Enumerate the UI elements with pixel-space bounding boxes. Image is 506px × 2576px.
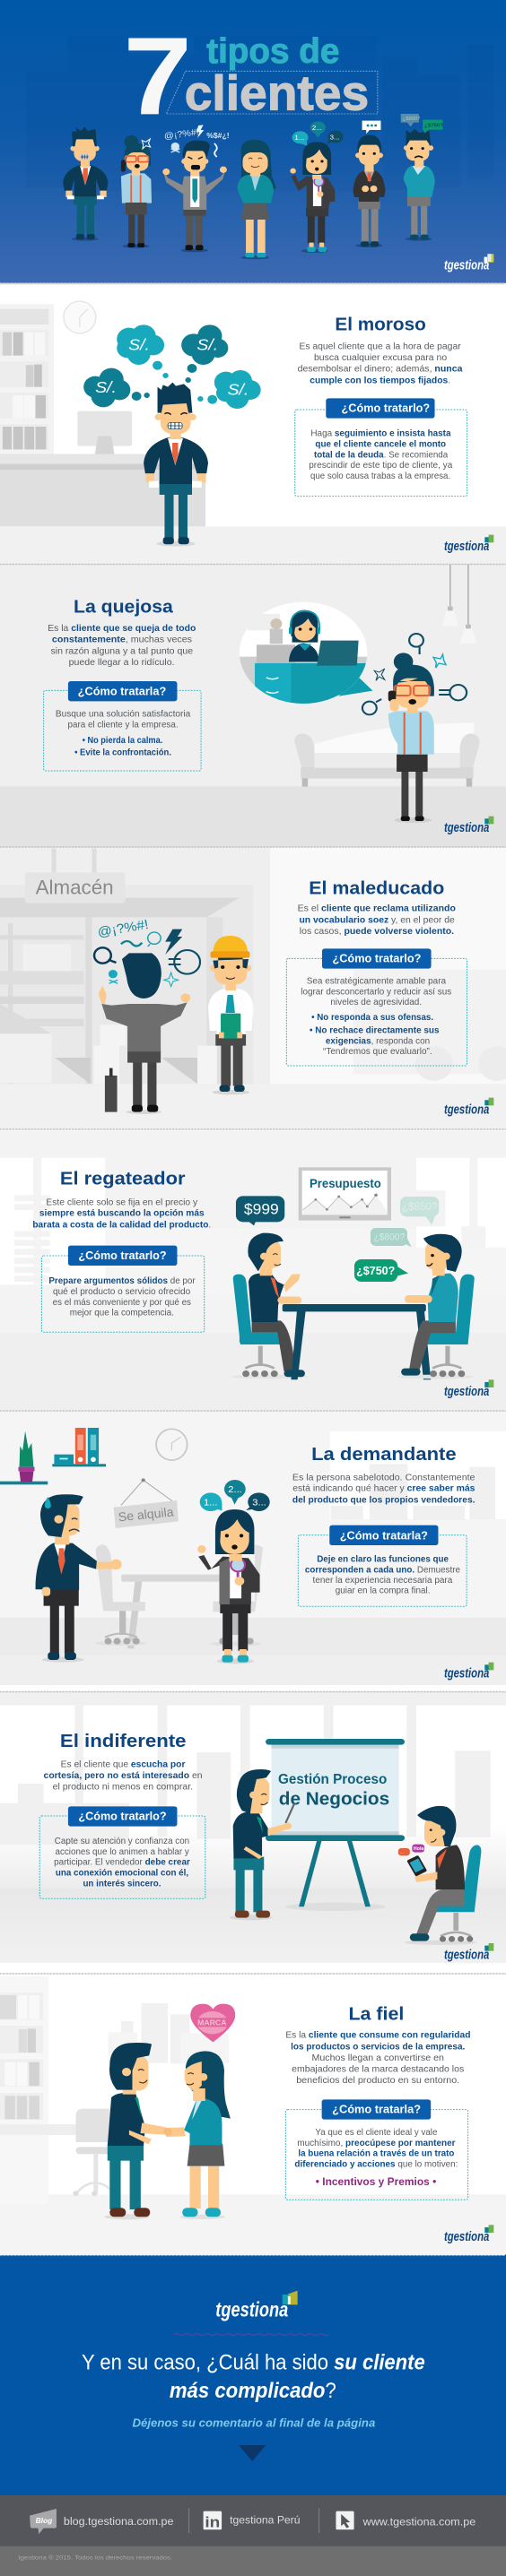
speech bubble: ¿$850?: [400, 1197, 439, 1225]
character: woman with magnifier: [197, 1480, 270, 1664]
advice box: una conexión emocional con él,: [56, 1868, 188, 1879]
advice box: qué el producto o servicio ofrecido: [53, 1286, 190, 1297]
description: está indicando qué hacer y cree saber más: [292, 1483, 475, 1494]
panel: links footer: [0, 2495, 506, 2576]
heading: La fiel: [348, 2003, 404, 2024]
advice box: Prepare argumentos sólidos de por: [48, 1275, 196, 1286]
advice box: ¿Cómo tratarlo?: [332, 951, 421, 965]
panel: el moroso: [0, 284, 506, 565]
panel: el regateador: [0, 1131, 506, 1410]
advice box: acciones que lo animen a hablar y: [56, 1846, 189, 1857]
speech bubble: $999: [236, 1196, 284, 1225]
flip chart: Gestión Proceso: [278, 1772, 388, 1787]
character: woman shaking hands: [163, 2051, 231, 2219]
description: [298, 903, 456, 937]
character: demandante: 2...: [312, 124, 322, 132]
advice box: • Incentivos y Premios •: [316, 2175, 436, 2188]
heading: El regateador: [60, 1168, 186, 1189]
description: cumple con los tiempos fijados.: [310, 376, 450, 385]
section edges: [0, 283, 506, 2255]
skyline background: [26, 36, 493, 191]
character: customer on phone: Hola: [414, 1846, 424, 1852]
advice box: [39, 1806, 205, 1898]
logo: tgestiona: [444, 1948, 490, 1962]
advice box: ¿Cómo tratarlo?: [342, 401, 430, 415]
title: clientes: clientes: [185, 66, 369, 121]
advice box: participar. El vendedor debe crear: [54, 1857, 191, 1868]
advice box: Deje en claro las funciones que: [317, 1554, 449, 1564]
character: woman on the phone: [362, 634, 467, 823]
character: maleducado: @¡?%#!: [163, 128, 200, 142]
link: website: www.tgestiona.com.pe: [362, 2516, 475, 2528]
advice box: total de la deuda. Se recomienda: [314, 450, 448, 460]
logo: [444, 535, 493, 554]
background office: [0, 1976, 229, 2203]
character: maleducado: %$#¿!: [206, 131, 230, 140]
character: man with empty pockets: [144, 383, 208, 547]
advice box: • Evite la confrontación.: [74, 748, 171, 758]
description: busca cualquier excusa para no: [314, 352, 447, 363]
description: Es la cliente que se queja de todo: [48, 623, 196, 634]
character: salesperson right in chair: [397, 1234, 475, 1379]
thought clouds: S/.: [128, 335, 150, 354]
copyright: tgestiona ® 2015. Todos los derechos reservados.: [19, 2554, 172, 2561]
link: website: [336, 2511, 475, 2529]
advice box: un interés sincero.: [83, 1879, 161, 1889]
background windows: [0, 1158, 506, 1295]
advice box: [298, 1526, 467, 1606]
icon: heart with brand: MARCA: [197, 2018, 227, 2027]
description: el producto ni menos en comprar.: [53, 1782, 193, 1793]
thought clouds: S/.: [95, 378, 117, 396]
advice box: corresponden a cada uno. Demuestre: [305, 1565, 460, 1575]
question: [82, 2350, 425, 2403]
advice box: • No pierda la calma.: [83, 735, 162, 746]
advice box: [295, 398, 467, 497]
character: angry man from behind: @¡?%#!: [96, 917, 150, 940]
speech bubble: ¿$850?: ¿$850?: [402, 1200, 437, 1213]
link: blog: [30, 2509, 174, 2534]
logo: [444, 1663, 493, 1681]
flip chart: [266, 1739, 405, 1911]
advice box: prescindir de este tipo de cliente, ya: [309, 460, 452, 471]
description: [44, 1759, 203, 1793]
character: warehouse worker: [208, 936, 253, 1094]
logo: tgestiona: [444, 1384, 490, 1399]
screen: presupuesto chart: [299, 1167, 391, 1221]
logo: [215, 2291, 298, 2321]
description: Es la cliente que consume con regularidad: [285, 2030, 470, 2041]
advice box: lograr desconcertarlo y reducir así sus: [301, 987, 451, 997]
description: [298, 341, 463, 385]
description: los casos, puede volverse violento.: [300, 926, 454, 937]
character: woman with magnifier: 1...: [204, 1498, 217, 1508]
character: customer on phone: ...: [400, 1850, 404, 1854]
character: customer on phone: [398, 1806, 481, 1945]
advice box: para el cliente y la empresa.: [68, 720, 179, 730]
background columns and buildings: [0, 1706, 491, 1845]
description: [48, 623, 196, 668]
thought clouds: S/.: [196, 335, 218, 354]
heading: La quejosa: [74, 596, 174, 617]
description: embajadores de la marca destacando los: [292, 2064, 464, 2075]
title: 7: 7: [123, 15, 192, 138]
logo: [444, 1943, 493, 1962]
link: blog: Blog: [36, 2516, 53, 2525]
subtitle: Déjenos su comentario al final de la página: [132, 2416, 376, 2429]
description: Este cliente solo se fija en el precio y: [46, 1197, 198, 1208]
background warehouse: [0, 849, 506, 1084]
advice box: [285, 2099, 468, 2200]
advice box: [44, 681, 201, 771]
advice box: guiar en la compra final.: [336, 1586, 430, 1596]
advice box: exigencias, responda con: [326, 1036, 430, 1046]
advice box: [41, 1246, 205, 1332]
character: demandante: [290, 121, 344, 253]
description: sin razón alguna y a tal punto que: [50, 646, 193, 656]
background window: [330, 1431, 506, 1520]
character: moroso: [63, 126, 108, 241]
heading: El moroso: [335, 314, 426, 334]
panel: la fiel: [0, 1974, 506, 2254]
dashed frame: [166, 71, 378, 114]
advice box: mejor que la competencia.: [70, 1308, 174, 1318]
advice box: “Tendremos que evaluarlo”.: [323, 1046, 432, 1057]
background office: [0, 301, 205, 526]
arrow down: [239, 2445, 266, 2461]
speech bubble: ¿$750?: [354, 1259, 408, 1282]
panel: el maleducado: [0, 847, 506, 1129]
advice box: Capte su atención y confianza con: [55, 1836, 189, 1846]
speech bubble: $999: $999: [244, 1200, 279, 1217]
character: woman with magnifier: 2...: [228, 1484, 242, 1495]
heading: La demandante: [311, 1444, 457, 1465]
logo: tgestiona: [215, 2298, 288, 2321]
character: woman with magnifier: 3...: [252, 1498, 266, 1508]
description: Muchos llegan a convertirse en: [311, 2053, 444, 2063]
thought clouds: S/.: [228, 380, 249, 398]
sign: se alquila: Se alquila: [118, 1506, 175, 1525]
description: [32, 1197, 211, 1230]
logo: [444, 817, 493, 835]
logo: tgestiona: [444, 258, 490, 272]
logo: [444, 1379, 493, 1399]
advice box: ¿Cómo tratarla?: [78, 684, 166, 697]
link: blog: blog.tgestiona.com.pe: [64, 2515, 174, 2528]
advice box: • No responda a sus ofensas.: [311, 1012, 433, 1023]
flip chart: de Negocios: [279, 1788, 389, 1809]
advice box: • No rechace directamente sus: [310, 1025, 440, 1035]
logo: tgestiona: [444, 2229, 490, 2244]
advice box: Busque una solución satisfactoria: [56, 709, 190, 720]
shelves with plant and binders: [0, 1428, 188, 1484]
logo: tgestiona: [444, 1666, 490, 1681]
thought clouds: [83, 324, 261, 409]
speech bubble: call agent: [239, 601, 372, 705]
logo: tgestiona: [444, 539, 490, 554]
speech bubble: ¿$800?: [371, 1228, 412, 1247]
description: siempre está buscando la opción más: [39, 1208, 205, 1219]
advice box: que el cliente cancele el monto: [315, 439, 447, 449]
character: regateador: [401, 114, 443, 241]
description: [292, 1473, 475, 1505]
sign: se alquila: [114, 1478, 179, 1528]
link: linkedin: in: [205, 2513, 220, 2530]
panel: la demandante: [0, 1411, 506, 1685]
description: beneficios del producto en su entorno.: [296, 2075, 459, 2086]
character: angry man from behind: [94, 917, 200, 1114]
panel: la quejosa: [0, 564, 506, 849]
description: los productos o servicios de la empresa.: [291, 2042, 465, 2052]
description: desembolsar el dinero; además, nunca: [298, 364, 463, 375]
link: linkedin: tgestiona Perú: [230, 2514, 301, 2526]
character: demandante: 1...: [294, 134, 304, 142]
panel: el indiferente: [0, 1691, 506, 1963]
advice box: la buena relación a través de un trato: [298, 2148, 455, 2159]
character: maleducado: [162, 125, 230, 252]
advice box: muchísimo, preocúpese por mantener: [297, 2138, 456, 2148]
lamps: [442, 565, 476, 644]
office furniture: [95, 1544, 263, 1648]
description: barata a costa de la calidad del producto.: [32, 1220, 211, 1230]
speech bubble: ¿$750?: ¿$750?: [356, 1264, 395, 1277]
logo: [444, 1098, 493, 1117]
advice box: diferenciado y acciones que lo motiven:: [294, 2159, 458, 2169]
character: regateador: ¿$800?: [403, 117, 420, 122]
logo: tgestiona: [444, 820, 490, 835]
description: del producto que los propios vendedores.: [292, 1495, 475, 1505]
advice box: niveles de agresividad.: [330, 997, 422, 1007]
advice box: ¿Cómo tratarla?: [332, 2102, 421, 2116]
link: linkedin: [204, 2511, 301, 2530]
advice box: [286, 948, 467, 1066]
advice box: tener la experiencia necesaria para: [313, 1575, 452, 1586]
description: puede llegar a lo ridículo.: [69, 657, 175, 668]
description: [285, 2030, 470, 2086]
character: man shaking hands: [104, 2043, 166, 2219]
advice box: ¿Cómo tratarla?: [340, 1528, 428, 1542]
question: más complicado?: [170, 2379, 336, 2403]
advice box: Sea estratégicamente amable para: [307, 976, 446, 986]
logo: [444, 2225, 493, 2244]
speech bubble: ¿$800?: ¿$800?: [374, 1232, 405, 1242]
advice box: ¿Cómo tratarlo?: [78, 1248, 167, 1262]
character: demandante: 3...: [330, 134, 340, 141]
character: presenter: [230, 1769, 294, 1920]
description: Es la persona sabelotodo. Constantemente: [292, 1473, 475, 1482]
panel: header: [0, 0, 506, 283]
advice box: Haga seguimiento e insista hasta: [310, 428, 451, 439]
table: [283, 1304, 431, 1379]
advice box: es el más conveniente y por qué es: [53, 1297, 191, 1308]
title: tipos de: tipos de: [206, 30, 339, 71]
description: Es aquel cliente que a la hora de pagar: [299, 341, 461, 351]
character: quejosa: [121, 135, 152, 248]
screen: presupuesto chart: Presupuesto: [310, 1177, 381, 1191]
description: Es el cliente que reclama utilizando: [298, 903, 456, 913]
character: customer left in chair: [231, 1233, 309, 1379]
panel: closing call to action: [0, 2254, 506, 2496]
sign: Almacén: Almacén: [36, 876, 114, 898]
advice box: que solo causa trabas a la empresa.: [310, 471, 450, 481]
description: constantemente, muchas veces: [52, 635, 192, 645]
description: un vocabulario soez y, en el peor de: [299, 915, 455, 925]
heading: El indiferente: [60, 1731, 187, 1751]
heading: El maleducado: [309, 877, 444, 898]
character: man pointing: [36, 1494, 122, 1663]
question: Y en su caso, ¿Cuál ha sido su cliente: [82, 2350, 425, 2374]
advice box: ¿Cómo tratarlo?: [78, 1809, 167, 1823]
character: regateador: ¿$750?: [424, 123, 443, 128]
logo: tgestiona: [444, 1102, 490, 1117]
advice box: Ya que es el cliente ideal y vale: [315, 2127, 437, 2138]
character: indiferente: [353, 121, 385, 247]
character: fiel: [237, 140, 276, 259]
logo: [444, 254, 493, 272]
sofa: [294, 723, 480, 787]
description: Es el cliente que escucha por: [61, 1759, 186, 1770]
icon: heart with brand: [190, 2004, 235, 2042]
description: cortesía, pero no está interesado en: [44, 1770, 203, 1781]
